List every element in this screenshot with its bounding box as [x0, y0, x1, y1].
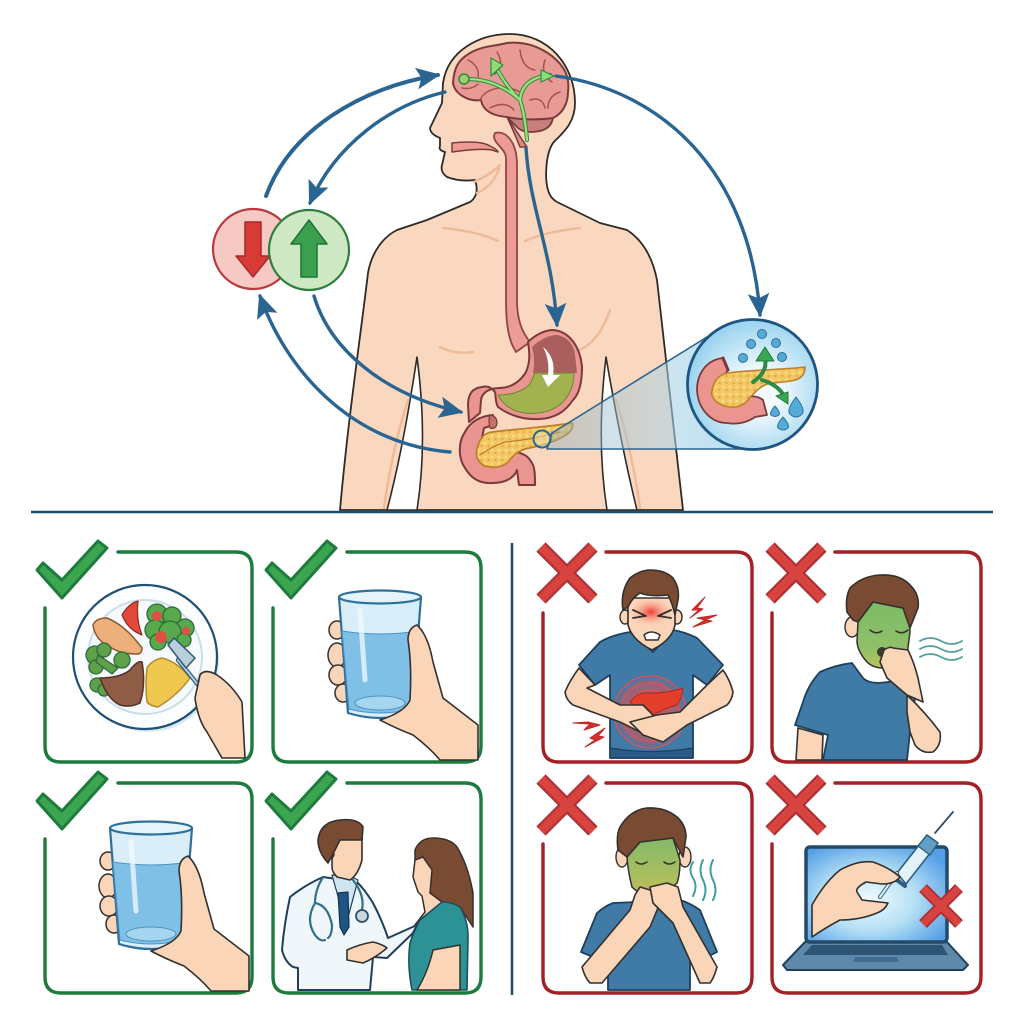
icon: check — [37, 772, 107, 829]
panel: glass of water bottom — [37, 772, 252, 993]
panel: healthy meal — [37, 541, 252, 762]
magnifier beam — [547, 337, 750, 449]
icon: check — [37, 541, 107, 598]
panel: stomach pain — [541, 547, 752, 762]
section divider: horizontal — [31, 511, 993, 513]
icon: cross — [770, 547, 822, 599]
icon: cross — [541, 547, 593, 599]
panel: nausea top — [770, 547, 981, 762]
icon: cross — [770, 779, 822, 831]
icon: check — [266, 772, 336, 829]
throat — [452, 142, 498, 152]
section divider: vertical — [511, 543, 513, 995]
panel: glass of water top — [266, 541, 481, 762]
magnified pancreas circle — [688, 320, 818, 450]
panel: online injection warning — [770, 779, 981, 993]
panel: nausea bottom — [541, 779, 752, 993]
icon: small cross — [923, 888, 959, 924]
panel: body diagram — [213, 34, 818, 510]
panel: doctor consultation — [266, 772, 481, 993]
body silhouette — [340, 34, 683, 510]
cycle arrows — [260, 75, 760, 452]
syringe — [880, 812, 953, 897]
down and up level indicators — [213, 209, 349, 290]
esophagus — [494, 133, 530, 352]
icon: check — [266, 541, 336, 598]
magnifier ring — [534, 430, 550, 448]
laptop screen — [806, 847, 947, 942]
icon: cross — [541, 779, 593, 831]
brain — [453, 43, 568, 147]
pancreas and duodenum — [460, 415, 573, 485]
laptop base — [783, 942, 968, 970]
stomach — [468, 330, 582, 422]
